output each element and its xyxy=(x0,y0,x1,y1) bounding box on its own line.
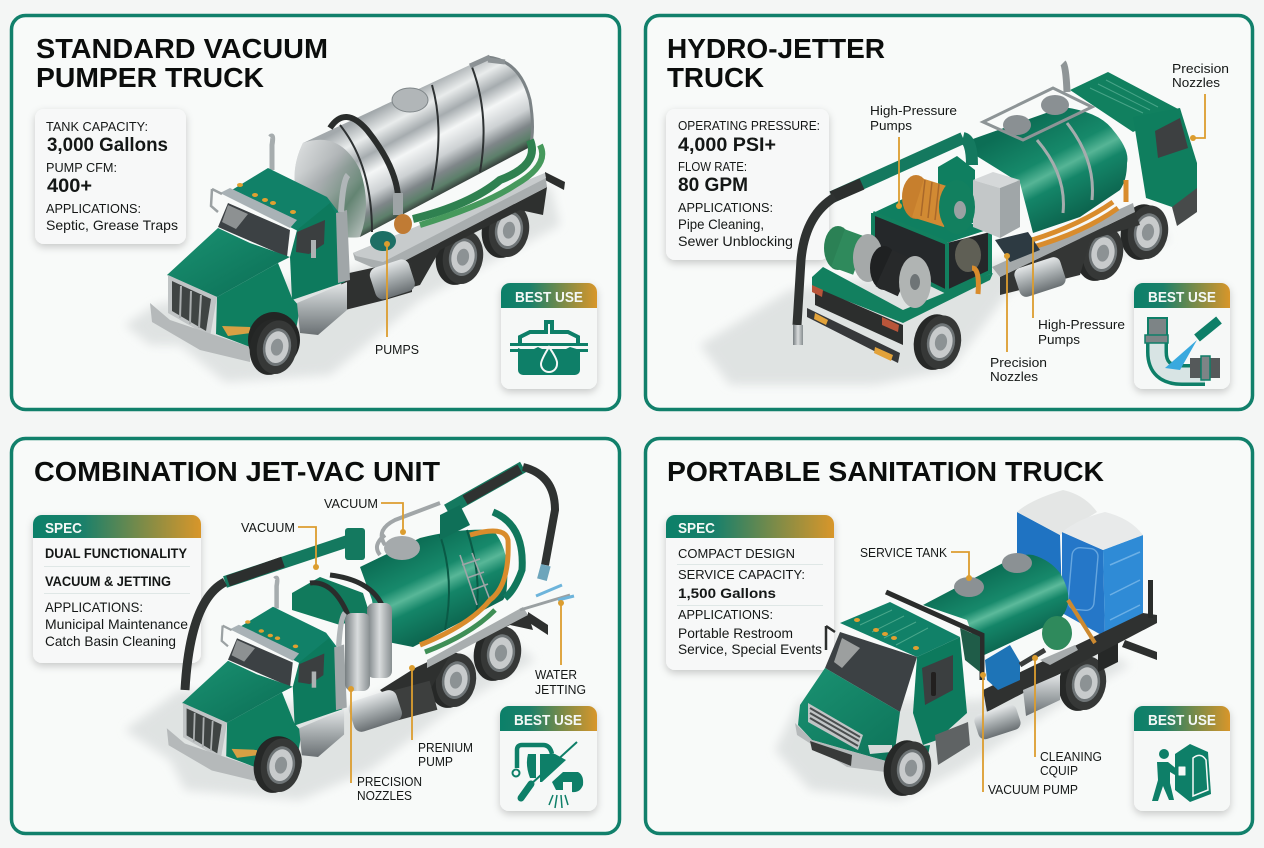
callout: water jetting: WATER xyxy=(535,667,577,682)
black reel xyxy=(870,246,931,308)
upper hose xyxy=(447,467,523,510)
spec card: APPLICATIONS: xyxy=(46,201,141,216)
callout: high-pressure pumps top xyxy=(870,103,957,209)
best use badge xyxy=(1134,283,1230,389)
truck illustration: jet-vac xyxy=(125,467,574,800)
spec card xyxy=(35,109,186,244)
callout: precision nozzles top: Nozzles xyxy=(1172,75,1221,90)
truck illustration: sanitation xyxy=(775,490,1157,800)
panel: hydro-jetter truck xyxy=(646,16,1252,410)
callout: high-pressure pumps bottom xyxy=(1033,237,1125,347)
spec card: Portable Restroom xyxy=(678,625,793,641)
spec card xyxy=(666,109,829,260)
panel: portable sanitation truck xyxy=(646,438,1252,834)
icon: septic tank xyxy=(510,322,588,375)
ground shadow xyxy=(700,210,1170,385)
orange reel xyxy=(902,175,975,234)
callout: high-pressure pumps bottom: High-Pressure xyxy=(1038,317,1125,332)
spec card: SERVICE CAPACITY: xyxy=(678,567,805,582)
spec card xyxy=(666,515,834,670)
spec card: DUAL FUNCTIONALITY xyxy=(45,545,188,561)
boom and hose xyxy=(832,138,963,197)
best use badge xyxy=(1134,706,1230,811)
water jet xyxy=(520,595,570,610)
title: STANDARD VACUUM xyxy=(36,33,328,64)
callouts xyxy=(870,61,1229,384)
callout: vacuum top xyxy=(324,496,406,535)
silver cylinders xyxy=(367,603,392,678)
title xyxy=(36,33,328,93)
spec card: SPEC xyxy=(45,520,82,537)
gray box xyxy=(973,172,1020,238)
ground shadow xyxy=(125,185,560,382)
callout: precision nozzles: NOZZLES xyxy=(357,788,412,803)
panel: combination jet-vac unit xyxy=(12,438,620,834)
panel frame xyxy=(12,16,620,410)
spec card: 400+ xyxy=(47,176,92,197)
spec card xyxy=(33,515,201,663)
callouts xyxy=(241,496,586,803)
spec card: 4,000 PSI+ xyxy=(678,135,776,156)
callout: precision nozzles bottom: Precision xyxy=(990,355,1047,370)
title: PUMPER TRUCK xyxy=(36,62,264,93)
spec card: Sewer Unblocking xyxy=(678,233,793,249)
title: PORTABLE SANITATION TRUCK xyxy=(667,456,1104,487)
spec card: VACUUM & JETTING xyxy=(45,573,171,589)
best use badge: BEST USE xyxy=(1148,712,1216,729)
spec card: SPEC xyxy=(678,520,715,537)
callout: premium pump xyxy=(409,665,473,769)
panel frame xyxy=(12,438,620,834)
green box xyxy=(292,577,370,625)
green reel xyxy=(824,226,883,282)
spec card: 80 GPM xyxy=(678,175,748,196)
vacuum dome and piping xyxy=(384,536,420,560)
spec card: TANK CAPACITY: xyxy=(46,119,148,134)
callout: service tank: SERVICE TANK xyxy=(860,545,947,560)
callout: precision nozzles bottom xyxy=(990,253,1047,384)
spec card: Catch Basin Cleaning xyxy=(45,633,176,649)
callouts xyxy=(860,545,1102,797)
title: HYDRO-JETTER xyxy=(667,33,885,64)
tank xyxy=(970,107,1127,233)
callout: vacuum left xyxy=(241,520,319,570)
icon: vacuum and jetting xyxy=(512,742,583,808)
panel: standard vacuum pumper truck xyxy=(12,16,620,410)
callout: premium pump: PUMP xyxy=(418,754,453,769)
panel frame xyxy=(646,16,1252,410)
truck illustration: hydro-jetter xyxy=(700,63,1197,385)
callout: high-pressure pumps bottom: Pumps xyxy=(1038,332,1081,347)
pump and reel xyxy=(985,645,1020,690)
title: COMBINATION JET-VAC UNIT xyxy=(34,456,440,487)
callout: pumps: PUMPS xyxy=(375,342,419,357)
callout: vacuum top: VACUUM xyxy=(324,496,378,511)
headboard xyxy=(886,592,982,680)
callout: water jetting xyxy=(535,600,586,697)
title xyxy=(667,33,885,93)
callout: high-pressure pumps top: Pumps xyxy=(870,118,913,133)
callout: pumps xyxy=(375,241,419,357)
callout: cleaning equip xyxy=(1032,655,1102,778)
panel frame xyxy=(646,438,1252,834)
callout: cleaning equip: CLEANING xyxy=(1040,749,1102,764)
best use badge xyxy=(500,706,597,811)
callout: precision nozzles xyxy=(348,686,422,803)
callout: vacuum pump xyxy=(980,672,1078,797)
spec card: Septic, Grease Traps xyxy=(46,217,178,233)
title: TRUCK xyxy=(667,62,764,93)
best use badge: BEST USE xyxy=(1148,289,1216,306)
spec card: OPERATING PRESSURE: xyxy=(678,118,820,133)
callout: premium pump: PRENIUM xyxy=(418,740,473,755)
callout: service tank xyxy=(860,545,972,581)
callout: water jetting: JETTING xyxy=(535,682,586,697)
callout: high-pressure pumps top: High-Pressure xyxy=(870,103,957,118)
icon: portable toilet service xyxy=(1152,744,1211,802)
bed xyxy=(812,267,993,323)
spec card: Pipe Cleaning, xyxy=(678,216,764,232)
boom xyxy=(225,537,360,582)
spec card: Service, Special Events xyxy=(678,641,822,657)
tank xyxy=(923,555,1068,657)
spec card: FLOW RATE: xyxy=(678,159,747,174)
orange hoses xyxy=(1030,202,1118,248)
spec card: PUMP CFM: xyxy=(46,160,117,175)
callout: vacuum left: VACUUM xyxy=(241,520,295,535)
ground shadow xyxy=(125,640,535,800)
spec card: APPLICATIONS: xyxy=(678,200,773,215)
spec card: Municipal Maintenance xyxy=(45,616,188,632)
best use badge: BEST USE xyxy=(515,289,583,306)
cab xyxy=(840,602,960,657)
icon: pipe jetting xyxy=(1145,318,1220,380)
callout: precision nozzles: PRECISION xyxy=(357,774,422,789)
spec card: 1,500 Gallons xyxy=(678,585,776,601)
callout: vacuum pump: VACUUM PUMP xyxy=(988,782,1078,797)
portable toilets xyxy=(1017,490,1143,637)
spec card: APPLICATIONS: xyxy=(45,599,143,615)
callout: precision nozzles top: Precision xyxy=(1172,61,1229,76)
callout: precision nozzles top xyxy=(1172,61,1229,141)
truck illustration: silver vacuum pumper xyxy=(125,57,565,382)
spec card: APPLICATIONS: xyxy=(678,607,773,622)
deck and frame xyxy=(1054,652,1110,714)
orange hose xyxy=(420,531,508,645)
spec card: 3,000 Gallons xyxy=(47,135,168,156)
cab xyxy=(1070,72,1180,132)
tank xyxy=(360,530,507,647)
callout: cleaning equip: CQUIP xyxy=(1040,763,1078,778)
spec card: COMPACT DESIGN xyxy=(678,546,795,561)
best use badge xyxy=(501,283,597,389)
ground shadow xyxy=(775,650,1130,800)
green machine frame xyxy=(873,213,990,292)
callout: precision nozzles bottom: Nozzles xyxy=(990,369,1039,384)
best use badge: BEST USE xyxy=(514,712,582,729)
